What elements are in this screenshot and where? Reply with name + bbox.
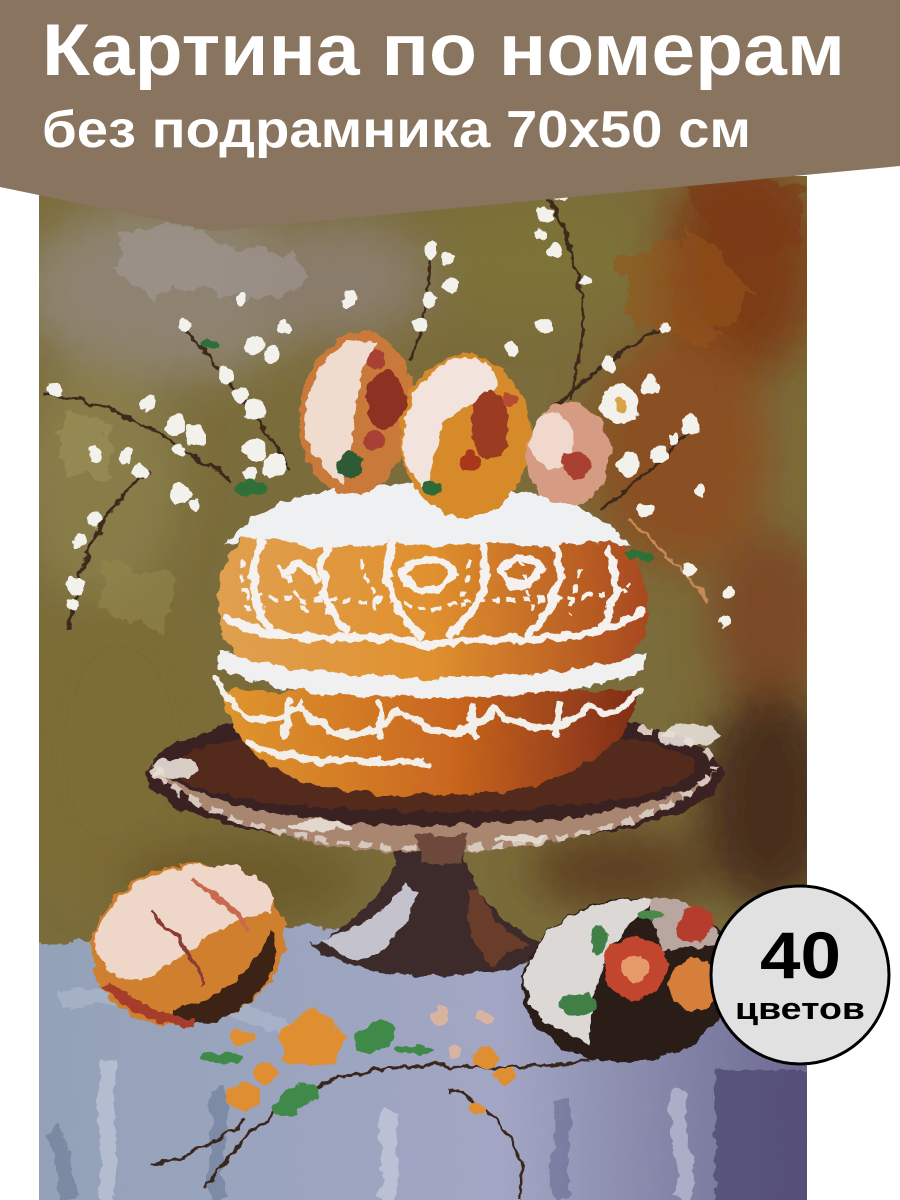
icing middle band (218, 650, 648, 698)
painted eggs on cake (289, 324, 610, 517)
egg: right (526, 403, 610, 507)
egg: front left (90, 862, 288, 1029)
cake lower tier (222, 690, 640, 796)
kulich cake (218, 484, 648, 796)
egg: front right (520, 897, 721, 1063)
spring twig with orange flowers (150, 1005, 590, 1200)
icing pattern lower (218, 680, 640, 765)
painting: Easter cake still life (20, 160, 840, 1200)
cake upper tier (216, 536, 650, 682)
tablecloth (30, 925, 820, 1200)
badge label: цветов (735, 991, 865, 1026)
cake stand (147, 703, 723, 976)
badge number: 40 (760, 918, 841, 992)
egg: left (298, 330, 413, 496)
sprigs of white blossom (42, 189, 734, 630)
badge: 40 colours (711, 886, 889, 1064)
painting background (39, 176, 807, 964)
white icing top (225, 484, 632, 549)
icing pattern upper (226, 540, 642, 645)
subtitle: без подрамника 70х50 см (42, 101, 751, 159)
egg: centre (400, 355, 530, 517)
title: Картина по номерам (42, 10, 845, 91)
header banner (0, 0, 900, 231)
